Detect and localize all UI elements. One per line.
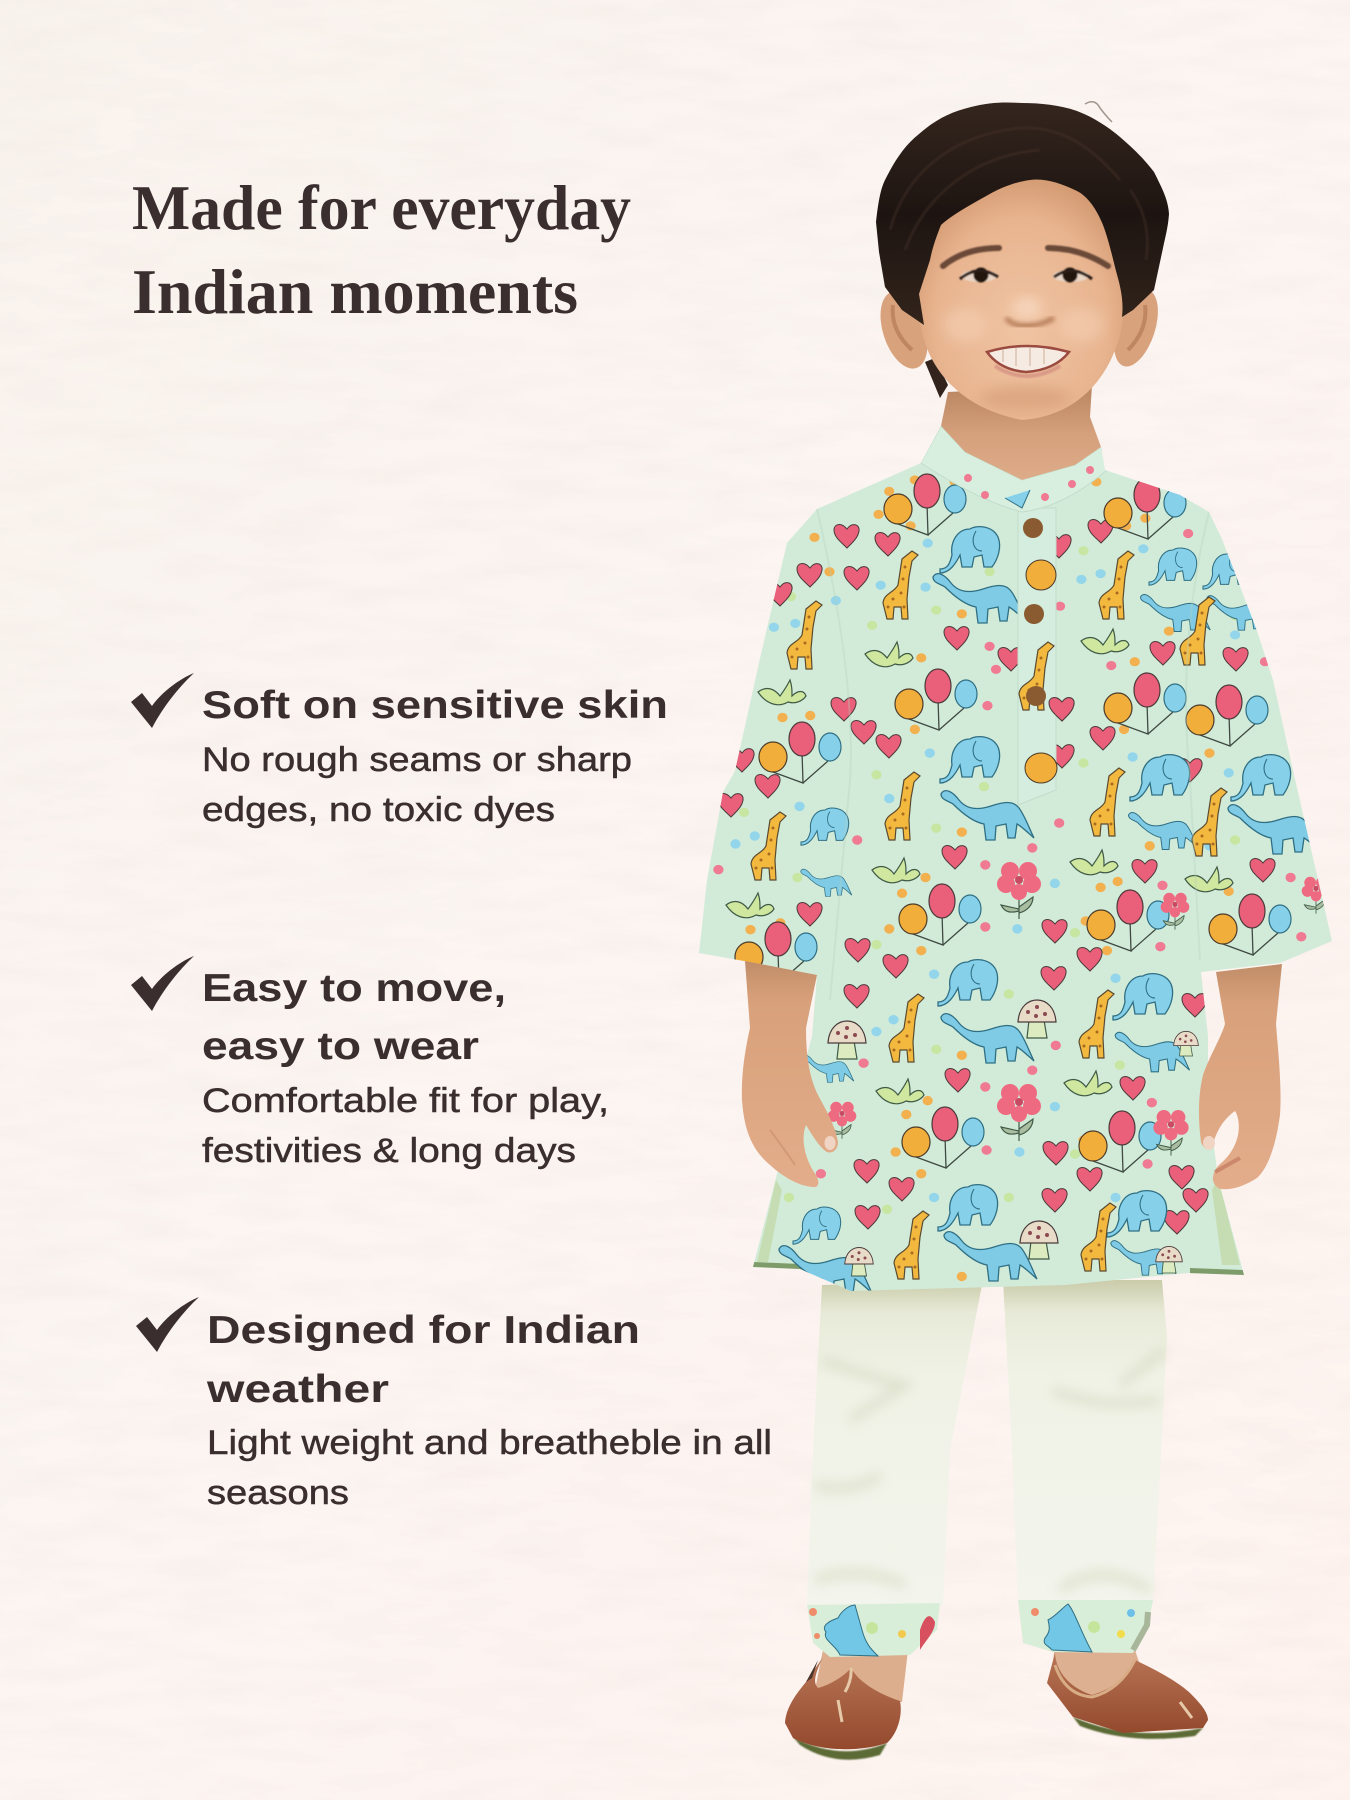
text: comfortable fit: festivities & long days	[202, 1132, 576, 1170]
heading: easy to move, easy to wear	[202, 967, 506, 1068]
panel: easy to move	[131, 956, 609, 1170]
text: no rough seams	[202, 741, 632, 829]
heading: easy to move, easy to wear: Easy to move,	[202, 967, 506, 1010]
nose	[1006, 318, 1054, 325]
left arm and hand	[742, 961, 838, 1187]
heading: designed for Indian weather	[206, 1309, 640, 1411]
trousers	[807, 1280, 1167, 1657]
print elephants	[793, 527, 1291, 1244]
text: comfortable fit	[202, 1082, 609, 1170]
left trouser cuff	[807, 1603, 940, 1657]
print dots upper	[774, 444, 1265, 669]
icon: check mark	[136, 1297, 199, 1352]
panel: designed for Indian weather	[136, 1297, 772, 1512]
text: no rough seams: No rough seams or sharp	[202, 741, 632, 779]
panel: soft on sensitive skin	[131, 673, 668, 829]
right trouser cuff	[1018, 1600, 1153, 1653]
text: comfortable fit: Comfortable fit for play,	[202, 1082, 609, 1120]
face details	[943, 248, 1108, 376]
eyebrows	[943, 248, 1108, 266]
print mushrooms	[828, 1000, 1198, 1276]
heading: easy to move, easy to wear: easy to wear	[202, 1025, 479, 1068]
shoes and feet	[785, 1645, 1208, 1760]
right arm and hand	[1199, 964, 1282, 1189]
text: no rough seams: edges, no toxic dyes	[202, 791, 555, 829]
sideburn at jaw	[925, 358, 948, 398]
text: light weight: seasons	[207, 1474, 349, 1512]
print giraffes	[751, 551, 1227, 1279]
text: light weight: Light weight and breatheble in all	[207, 1424, 772, 1462]
kurta print	[718, 426, 1330, 1295]
title	[132, 172, 631, 327]
neck	[941, 385, 1101, 485]
title: Made for everyday	[132, 172, 631, 243]
print dinosaurs	[779, 574, 1321, 1295]
print flowers	[828, 862, 1330, 1156]
print birds	[726, 629, 1233, 1104]
print dots lower	[718, 706, 1301, 1276]
ears	[872, 284, 1166, 375]
print balloons	[735, 474, 1291, 1172]
icon: check mark	[131, 956, 194, 1011]
kurta	[699, 102, 1332, 1295]
heading: designed for Indian weather: weather	[206, 1368, 389, 1411]
eyes	[960, 268, 1092, 282]
face	[919, 170, 1124, 420]
collar	[921, 426, 1107, 512]
mouth	[987, 346, 1069, 372]
print hearts	[718, 520, 1275, 1234]
heading: designed for Indian weather: Designed for Indian	[207, 1309, 640, 1352]
title: Indian moments	[132, 256, 578, 327]
figure: smiling boy in printed kurta	[699, 102, 1332, 1760]
text: light weight	[207, 1424, 772, 1512]
placket	[1018, 508, 1074, 805]
icon: check mark	[131, 673, 194, 728]
buttons	[1023, 518, 1046, 706]
hair	[876, 102, 1169, 325]
heading: soft on sensitive skin: Soft on sensitive skin	[202, 684, 668, 727]
